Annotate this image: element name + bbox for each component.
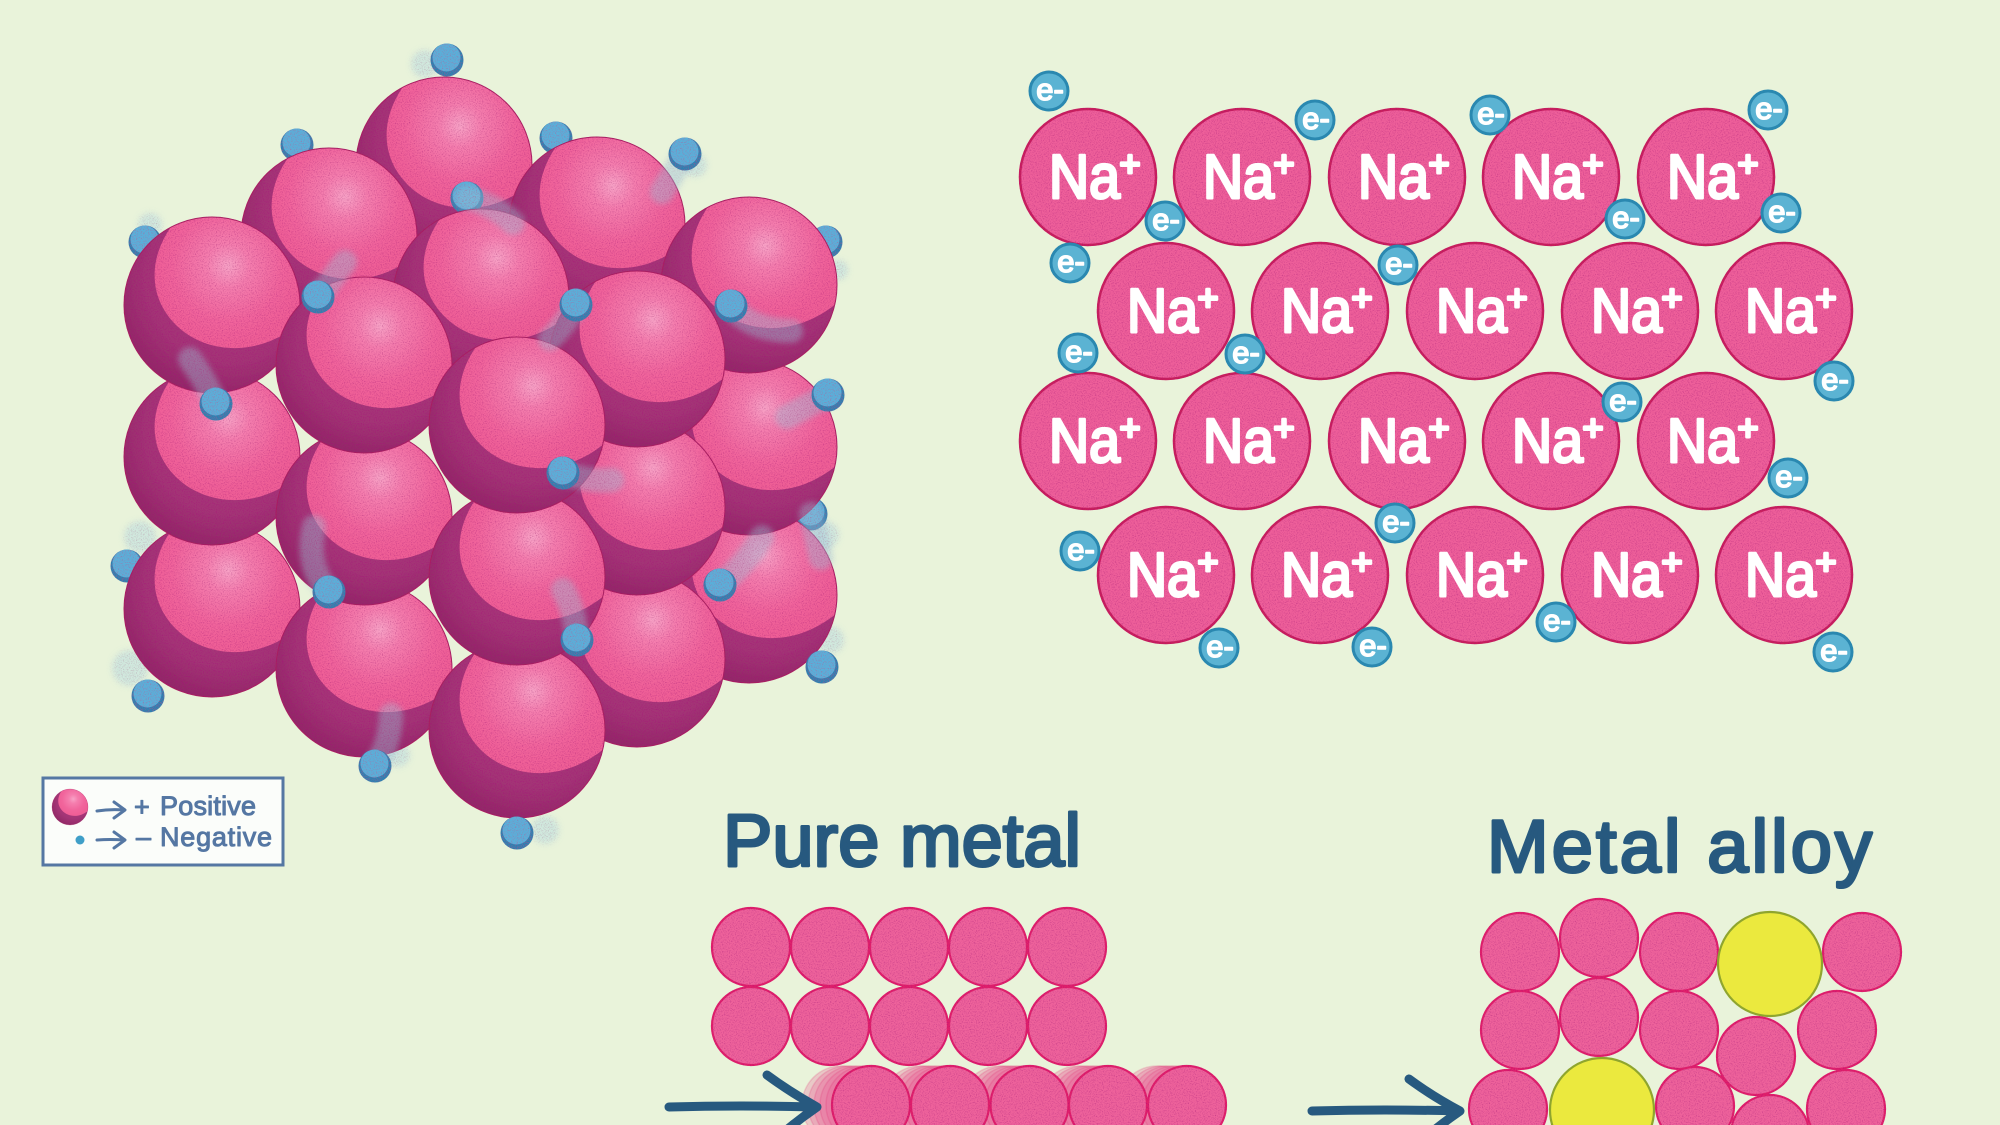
sphere: top layer back left: [241, 136, 429, 324]
sodium ions row 2: Na: [1281, 277, 1352, 346]
sodium ions row 1: Na: [1358, 143, 1429, 212]
legend icon: negative electron: [76, 836, 84, 844]
legend label: negative: Negative: [160, 822, 272, 852]
sphere: middle layer front: [429, 477, 617, 665]
sphere: top layer back right: [509, 125, 697, 313]
sodium ions row 2: Na: [1745, 277, 1816, 346]
diagram: sodium ions and delocalised electrons: [1020, 72, 1853, 671]
sodium ions row 3: +: [1428, 407, 1450, 448]
delocalised electrons: e-: [1302, 101, 1330, 136]
sphere: top layer far right: [661, 185, 849, 373]
sodium ions row 3: Na: [1512, 407, 1583, 476]
legend icon: positive ion: [52, 786, 90, 825]
heading: Pure metal: Pure metal: [723, 799, 1081, 882]
sphere: bottom layer mid right: [549, 559, 737, 747]
sodium ions row 2: +: [1815, 277, 1837, 318]
sodium ions row 1: Na: [1512, 143, 1583, 212]
delocalised electrons: e-: [1755, 91, 1783, 126]
arrow: force on pure metal: [669, 1075, 817, 1125]
sodium ions row 3: +: [1273, 407, 1295, 448]
delocalised electrons: [1030, 72, 1853, 671]
delocalised electrons: e-: [1775, 459, 1803, 494]
legend arrow: positive: [97, 802, 125, 818]
sodium ions row 1: Na: [1203, 143, 1274, 212]
sodium ions row 1: Na: [1049, 143, 1120, 212]
sodium ions row 4: Na: [1436, 541, 1507, 610]
delocalised electrons: e-: [1382, 504, 1410, 539]
sodium ions row 4: +: [1815, 541, 1837, 582]
sphere: middle layer left: [124, 357, 312, 545]
sodium ions row 3: +: [1119, 407, 1141, 448]
sphere: bottom layer right: [661, 495, 849, 683]
sodium ions row 1: +: [1582, 143, 1604, 184]
delocalised electrons: e-: [1152, 202, 1180, 237]
sphere: bottom layer mid left: [276, 569, 464, 757]
sodium ions row 2: [1098, 243, 1852, 379]
sodium ions row 4: Na: [1745, 541, 1816, 610]
sphere: top layer centre left: [276, 265, 464, 453]
sodium ions row 3: +: [1582, 407, 1604, 448]
delocalised electrons: e-: [1385, 246, 1413, 281]
electrons hidden behind the spheres: [110, 122, 842, 582]
sodium ions row 4: Na: [1281, 541, 1352, 610]
legend label: negative: –: [136, 822, 151, 852]
top row of atoms: [712, 908, 1106, 986]
legend label: positive: +: [134, 792, 150, 822]
sodium ions row 1: +: [1119, 143, 1141, 184]
yellow alloying atom: upper: [1718, 912, 1822, 1016]
delocalised electrons: e-: [1820, 633, 1848, 668]
sodium ions row 2: Na: [1436, 277, 1507, 346]
sphere: middle layer mid left: [276, 417, 464, 605]
sodium ions row 4: [1098, 507, 1852, 643]
sphere: top layer far left: [124, 205, 312, 393]
arrow: force on alloy: [1312, 1079, 1460, 1125]
delocalised electrons: e-: [1206, 629, 1234, 664]
electron motion trails: [190, 154, 828, 766]
sphere: top layer front: [429, 325, 617, 513]
sodium ions row 2: +: [1506, 277, 1528, 318]
sodium ions row 2: Na: [1127, 277, 1198, 346]
delocalised electrons: e-: [1036, 72, 1064, 107]
delocalised electrons: e-: [1768, 194, 1796, 229]
sodium ions row 4: +: [1506, 541, 1528, 582]
sphere: top layer centre back: [393, 197, 581, 385]
motion ghosts of the sliding row: [802, 1066, 1220, 1125]
delocalised electrons: e-: [1067, 532, 1095, 567]
delocalised electrons: e-: [1359, 628, 1387, 663]
sodium ions row 4: Na: [1127, 541, 1198, 610]
sphere: top layer centre right: [549, 259, 737, 447]
delocalised electrons: e-: [1821, 362, 1849, 397]
sodium ions row 3: Na: [1358, 407, 1429, 476]
electron between back spheres: [450, 182, 484, 214]
legend label: positive: Positive: [160, 791, 256, 821]
heading: Metal alloy: Metal alloy: [1487, 805, 1872, 888]
sphere: top layer back: [356, 65, 544, 253]
sodium ions row 1: Na: [1667, 143, 1738, 212]
sodium ions row 4: +: [1661, 541, 1683, 582]
sodium ions row 1: +: [1428, 143, 1450, 184]
sodium ions row 2: Na: [1591, 277, 1662, 346]
sphere: middle layer mid right: [549, 407, 737, 595]
sodium ions row 2: +: [1661, 277, 1683, 318]
sodium ions row 2: +: [1351, 277, 1373, 318]
3D metal lattice: positive ions in a sea of electrons: [110, 44, 849, 850]
delocalised electrons: e-: [1612, 200, 1640, 235]
sodium ions row 3: [1020, 373, 1774, 509]
sodium ions row 3: Na: [1203, 407, 1274, 476]
diagram: pure metal layers sliding: [669, 908, 1226, 1125]
sodium ions row 3: Na: [1667, 407, 1738, 476]
sodium ions row 4: +: [1197, 541, 1219, 582]
sphere: middle layer right: [661, 347, 849, 535]
sphere: bottom layer front: [429, 630, 617, 818]
delocalised electrons: e-: [1477, 96, 1505, 131]
sodium ions row 1: +: [1273, 143, 1295, 184]
delocalised electrons: e-: [1543, 603, 1571, 638]
sodium ions row 3: Na: [1049, 407, 1120, 476]
pink metal atoms: [1469, 899, 1901, 1125]
sodium ions row 4: Na: [1591, 541, 1662, 610]
free electrons on the lattice surface: [132, 44, 844, 850]
sphere: bottom layer left: [124, 509, 312, 697]
sodium ions row 2: +: [1197, 277, 1219, 318]
delocalised electrons: e-: [1057, 244, 1085, 279]
sodium ions row 1: +: [1737, 143, 1759, 184]
sodium ions row 4: +: [1351, 541, 1373, 582]
sliding bottom row of atoms: [832, 1066, 1226, 1125]
sodium ions row 3: +: [1737, 407, 1759, 448]
delocalised electrons: e-: [1609, 383, 1637, 418]
diagram: metal alloy with larger atoms blocking sliding: [1312, 899, 1901, 1125]
legend box: [43, 778, 283, 865]
delocalised electrons: e-: [1232, 335, 1260, 370]
legend arrow: negative: [97, 832, 125, 848]
sodium ions row 1: [1020, 109, 1774, 245]
pale electron motion halos: [112, 50, 848, 844]
delocalised electrons: e-: [1065, 334, 1093, 369]
middle row of atoms: [712, 987, 1106, 1065]
yellow alloying atom: lower: [1550, 1058, 1654, 1125]
